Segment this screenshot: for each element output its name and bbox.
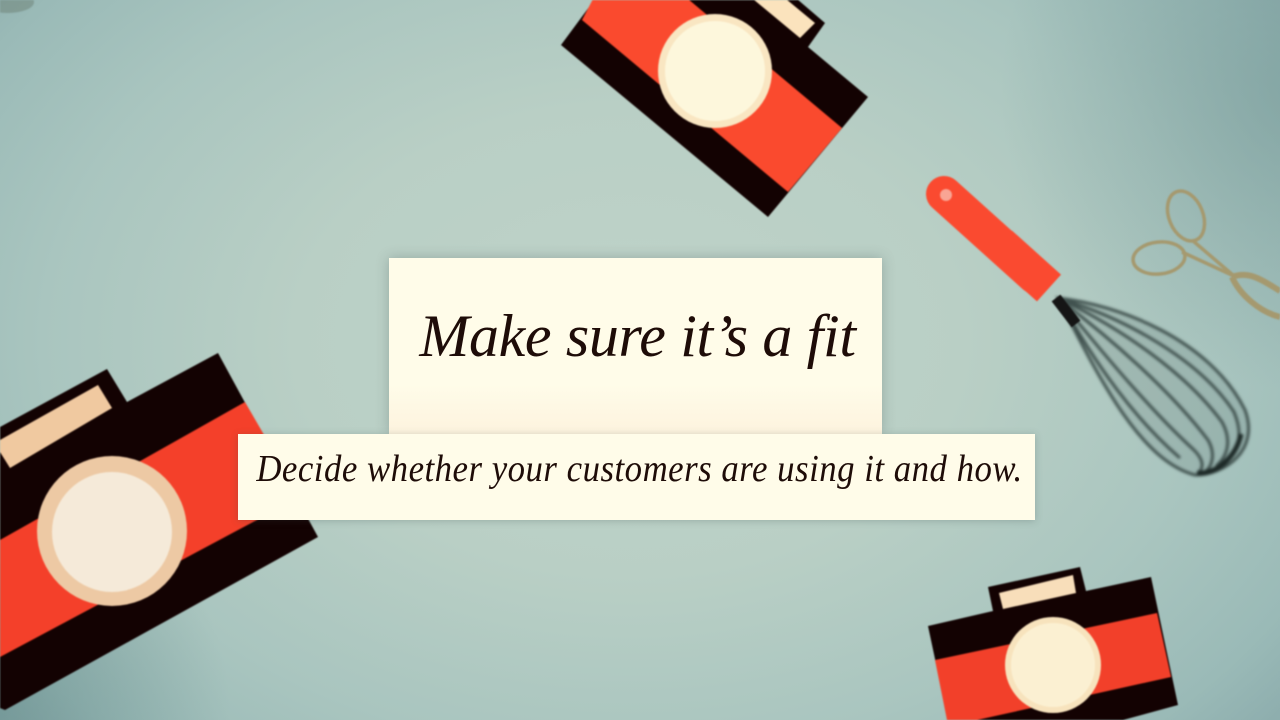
icon: scissors: [1131, 186, 1280, 317]
panel: subtitle strip: [238, 434, 1035, 520]
subtitle: Decide whether your customers are using it and how.: [256, 448, 1023, 490]
icon: corner fragment: [0, 0, 34, 13]
icon: left camera: [0, 353, 318, 710]
title: Make sure it’s a fit: [419, 303, 856, 369]
icon: bottom right camera: [928, 567, 1178, 720]
icon: top camera: [561, 0, 868, 217]
panel: title card: [389, 258, 882, 434]
icon: whisk: [940, 189, 1249, 475]
